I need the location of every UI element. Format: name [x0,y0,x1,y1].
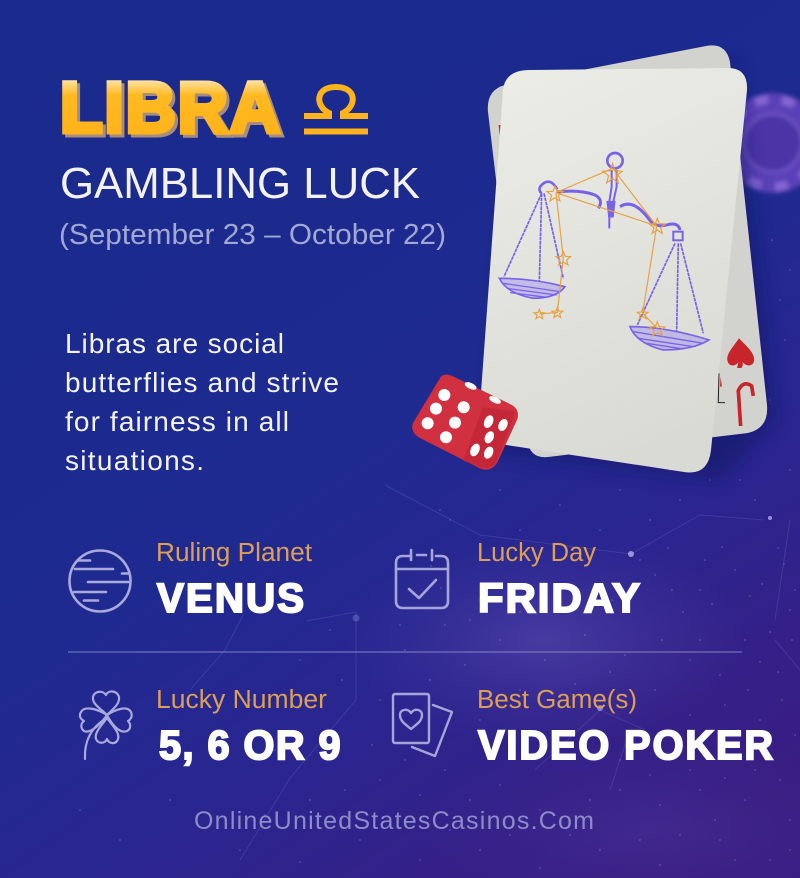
stat: best games [393,686,775,768]
value: VIDEO POKER [478,722,775,768]
label: Ruling Planet [156,539,312,567]
value: 5, 6 OR 9 [159,722,342,768]
icon: purple poker chip [723,93,800,193]
icon: four-leaf clover [80,691,132,759]
card shadow [490,60,775,480]
divider [68,651,742,653]
stat: lucky day [396,539,642,621]
title: LIBRA: LIBRA [63,72,285,151]
description text: for fairness in all [65,406,289,437]
label: Best Game(s) [477,686,637,714]
description text: Libras are social [65,328,284,359]
scales in violet [499,153,709,350]
icon: libra zodiac symbol [304,87,368,132]
label: Lucky Day [477,539,596,567]
footer website credit: OnlineUnitedStatesCasinos.Com [194,807,594,835]
date range: (September 23 – October 22) [59,219,446,251]
icon: planet venus [70,550,130,612]
description text [65,328,339,476]
value: FRIDAY [478,575,642,621]
constellation lines in orange [534,163,665,336]
playing cards illustration [479,45,775,480]
icon: cards with heart [393,694,452,756]
back card [488,45,767,457]
title: LIBRA: LIBRA [60,69,282,148]
description text: butterflies and strive [65,367,339,398]
description text: situations. [65,445,204,476]
icon: red dice [413,376,517,469]
label: Lucky Number [156,686,328,714]
heading: gambling luck: GAMBLING LUCK [60,160,420,208]
stat: ruling planet [70,539,312,621]
libra scales drawing with constellation [499,153,709,350]
value: VENUS [157,575,306,621]
stat: lucky number [80,686,342,768]
front card [479,68,747,473]
icon: calendar [396,550,448,608]
